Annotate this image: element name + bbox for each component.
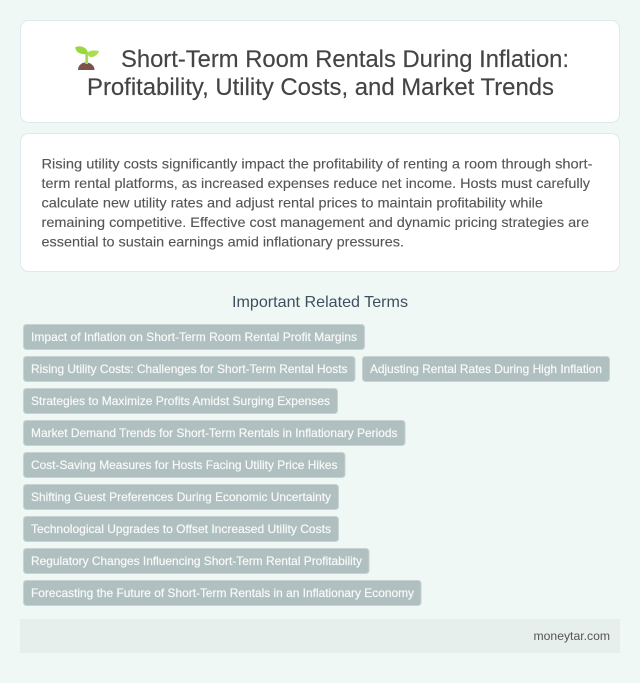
heading: Profitability, Utility Costs, and Market Trends — [87, 74, 554, 101]
tag: Cost-Saving Measures for Hosts Facing Utility Price Hikes — [31, 458, 338, 472]
heading — [87, 46, 569, 101]
panel: summary paragraph: essential to sustain earnings amid inflationary pressures. — [42, 234, 404, 250]
related terms tags — [24, 324, 610, 606]
tag: Regulatory Changes Influencing Short-Term Rental Profitability — [31, 554, 362, 568]
footer: moneytar.com — [534, 629, 610, 643]
panel: summary paragraph: Rising utility costs significantly impact the profitability of renting a room through short- — [42, 156, 593, 172]
panel: summary paragraph — [20, 134, 620, 272]
footer — [20, 619, 620, 653]
tag — [24, 548, 369, 574]
tag: Rising Utility Costs: Challenges for Short-Term Rental Hosts — [31, 362, 348, 376]
tag: Forecasting the Future of Short-Term Rentals in an Inflationary Economy — [31, 586, 414, 600]
tag: Strategies to Maximize Profits Amidst Surging Expenses — [31, 394, 330, 408]
tag — [24, 580, 421, 606]
section heading: related terms: Important Related Terms — [232, 294, 408, 311]
panel: summary paragraph: remaining competitive. Effective cost management and dynamic pricing strategies are — [42, 214, 589, 230]
tag: Impact of Inflation on Short-Term Room Rental Profit Margins — [31, 330, 357, 344]
tag: Shifting Guest Preferences During Economic Uncertainty — [31, 490, 331, 504]
icon: seedling — [75, 46, 99, 70]
tag — [24, 388, 338, 414]
tag: Adjusting Rental Rates During High Inflation — [370, 362, 602, 376]
tag — [24, 324, 364, 350]
tag — [362, 356, 610, 382]
panel: summary paragraph: calculate new utility rates and adjust rental prices to maintain profitability while — [42, 194, 543, 210]
title card — [20, 20, 620, 122]
heading: Short-Term Room Rentals During Inflation: — [121, 46, 569, 73]
tag — [24, 420, 405, 446]
tag — [24, 516, 338, 542]
tag: Technological Upgrades to Offset Increased Utility Costs — [31, 522, 331, 536]
tag — [24, 484, 338, 510]
tag — [24, 452, 345, 478]
tag — [24, 356, 355, 382]
panel: summary paragraph: term rental platforms, as increased expenses reduce net income. Hosts must carefully — [42, 175, 590, 191]
tag: Market Demand Trends for Short-Term Rentals in Inflationary Periods — [31, 426, 398, 440]
